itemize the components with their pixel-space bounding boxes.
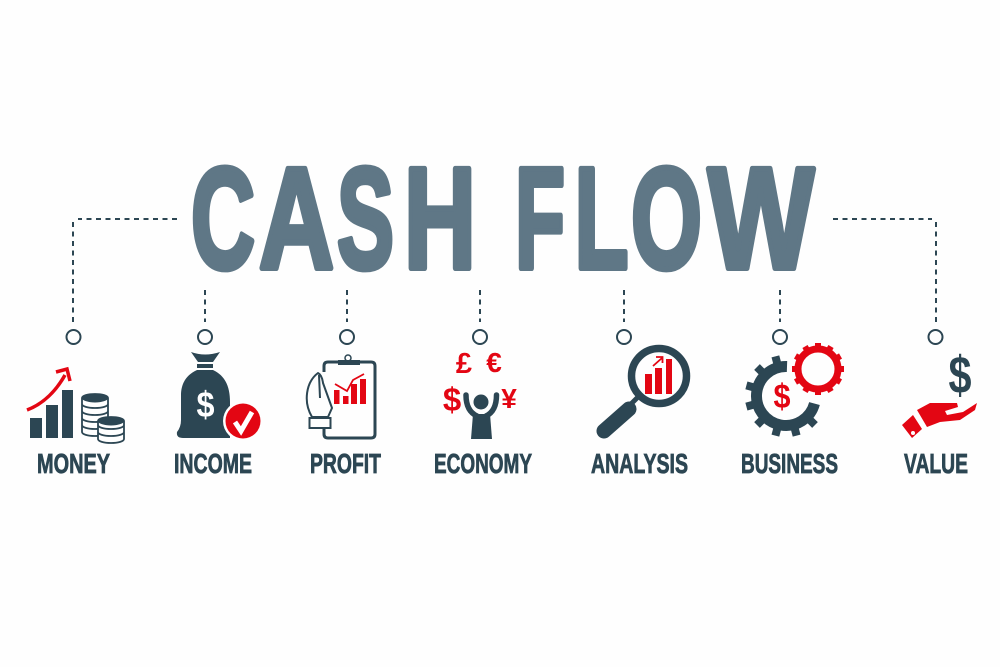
icon: profit — [307, 355, 375, 438]
connector nodes — [66, 330, 942, 344]
labels: ANALYSIS — [591, 448, 688, 479]
labels: MONEY — [37, 448, 110, 479]
icon: business: $ — [774, 378, 791, 416]
labels: ECONOMY — [434, 448, 532, 479]
icon: economy: $ — [443, 381, 461, 418]
icon: economy: € — [486, 347, 502, 378]
icon: economy: ¥ — [501, 383, 517, 414]
title: A — [259, 138, 334, 299]
title: L — [574, 138, 628, 299]
title: F — [515, 138, 565, 299]
labels: PROFIT — [310, 448, 381, 479]
labels: INCOME — [174, 448, 252, 479]
icon: analysis — [604, 348, 686, 431]
icon: money — [27, 369, 124, 443]
title: O — [631, 138, 702, 299]
title: W — [708, 138, 814, 299]
title: C — [191, 138, 255, 299]
labels: BUSINESS — [741, 448, 838, 479]
icon: income — [177, 352, 263, 441]
title: S — [337, 138, 394, 299]
title: H — [404, 138, 476, 299]
icon: business — [746, 343, 844, 436]
connector lines — [73, 219, 936, 322]
icon: value — [902, 346, 977, 438]
icon: value: $ — [948, 346, 972, 405]
icon: economy: £ — [456, 348, 472, 380]
labels — [37, 448, 968, 479]
icon: income: $ — [196, 384, 214, 425]
icon: economy — [443, 347, 517, 439]
labels: VALUE — [904, 448, 968, 479]
